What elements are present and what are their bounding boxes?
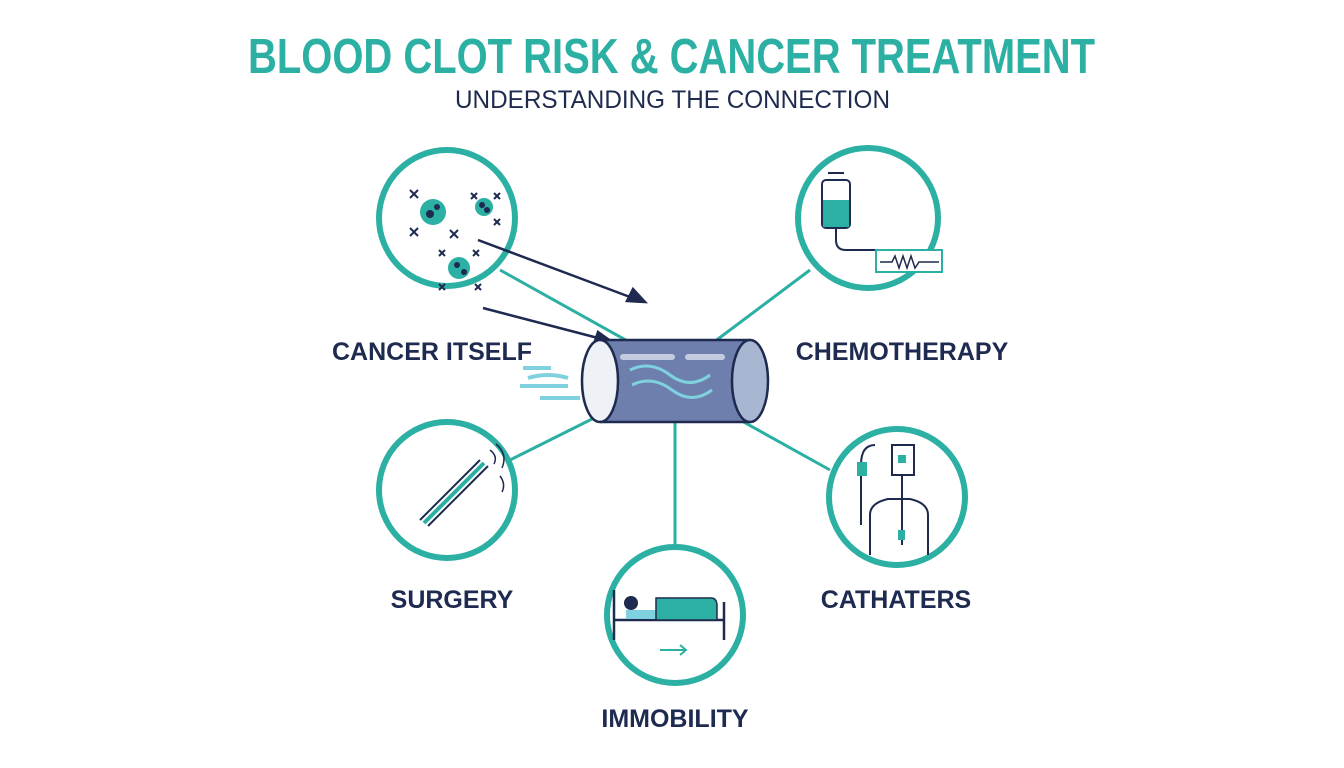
title: BLOOD CLOT RISK & CANCER TREATMENT	[248, 30, 1095, 84]
subtitle: UNDERSTANDING THE CONNECTION	[455, 86, 890, 114]
panel: chemotherapy	[796, 148, 1009, 366]
label: CANCER ITSELF	[332, 338, 532, 366]
panel: cathaters: CATHATERS	[821, 586, 971, 614]
panel: cancer itself	[332, 150, 645, 366]
panel: immobility: IMMOBILITY	[601, 705, 749, 733]
panel: immobility	[601, 547, 749, 733]
arrows	[478, 240, 645, 344]
panel: surgery	[379, 422, 515, 614]
panel: cathaters	[821, 429, 971, 614]
panel: chemotherapy: CHEMOTHERAPY	[796, 338, 1009, 366]
panel: surgery: SURGERY	[391, 586, 514, 614]
connector lines	[500, 270, 830, 548]
vessel	[520, 340, 768, 422]
